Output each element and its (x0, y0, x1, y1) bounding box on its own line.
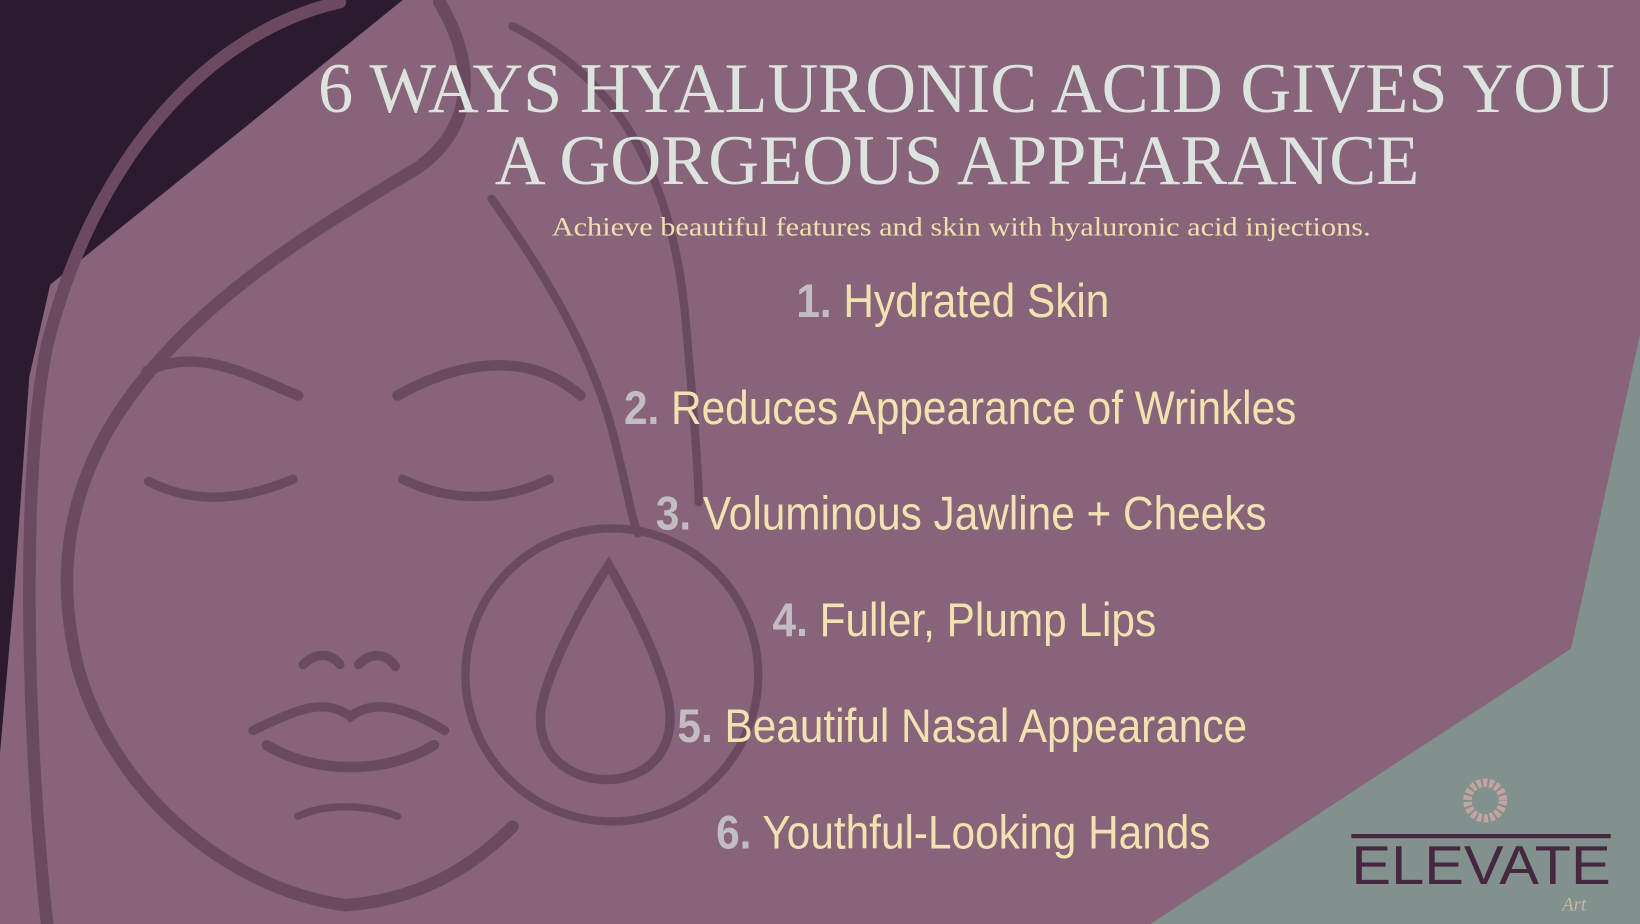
grey-green corner panel (1151, 335, 1640, 924)
logo: Elevate: ELEVATE (1351, 835, 1611, 896)
title: 6 WAYS HYALURONIC ACID GIVES YOU (318, 50, 1615, 128)
hair dark region (0, 0, 403, 753)
icon: water drop in circle (465, 528, 758, 821)
logo: Elevate (1351, 783, 1611, 915)
list of benefits: 5. Beautiful Nasal Appearance (677, 700, 1247, 752)
subtitle: Achieve beautiful features and skin with hyaluronic acid injections. (552, 212, 1371, 241)
face illustration (29, 2, 699, 924)
list of benefits: 1. Hydrated Skin (796, 275, 1109, 328)
list of benefits (624, 275, 1296, 859)
logo: Elevate: Art (1560, 894, 1587, 915)
title: A GORGEOUS APPEARANCE (495, 122, 1419, 200)
list of benefits: 3. Voluminous Jawline + Cheeks (656, 487, 1267, 540)
title (318, 50, 1615, 200)
list of benefits: 6. Youthful-Looking Hands (716, 807, 1210, 859)
list of benefits: 2. Reduces Appearance of Wrinkles (624, 382, 1296, 434)
list of benefits: 4. Fuller, Plump Lips (773, 594, 1156, 647)
